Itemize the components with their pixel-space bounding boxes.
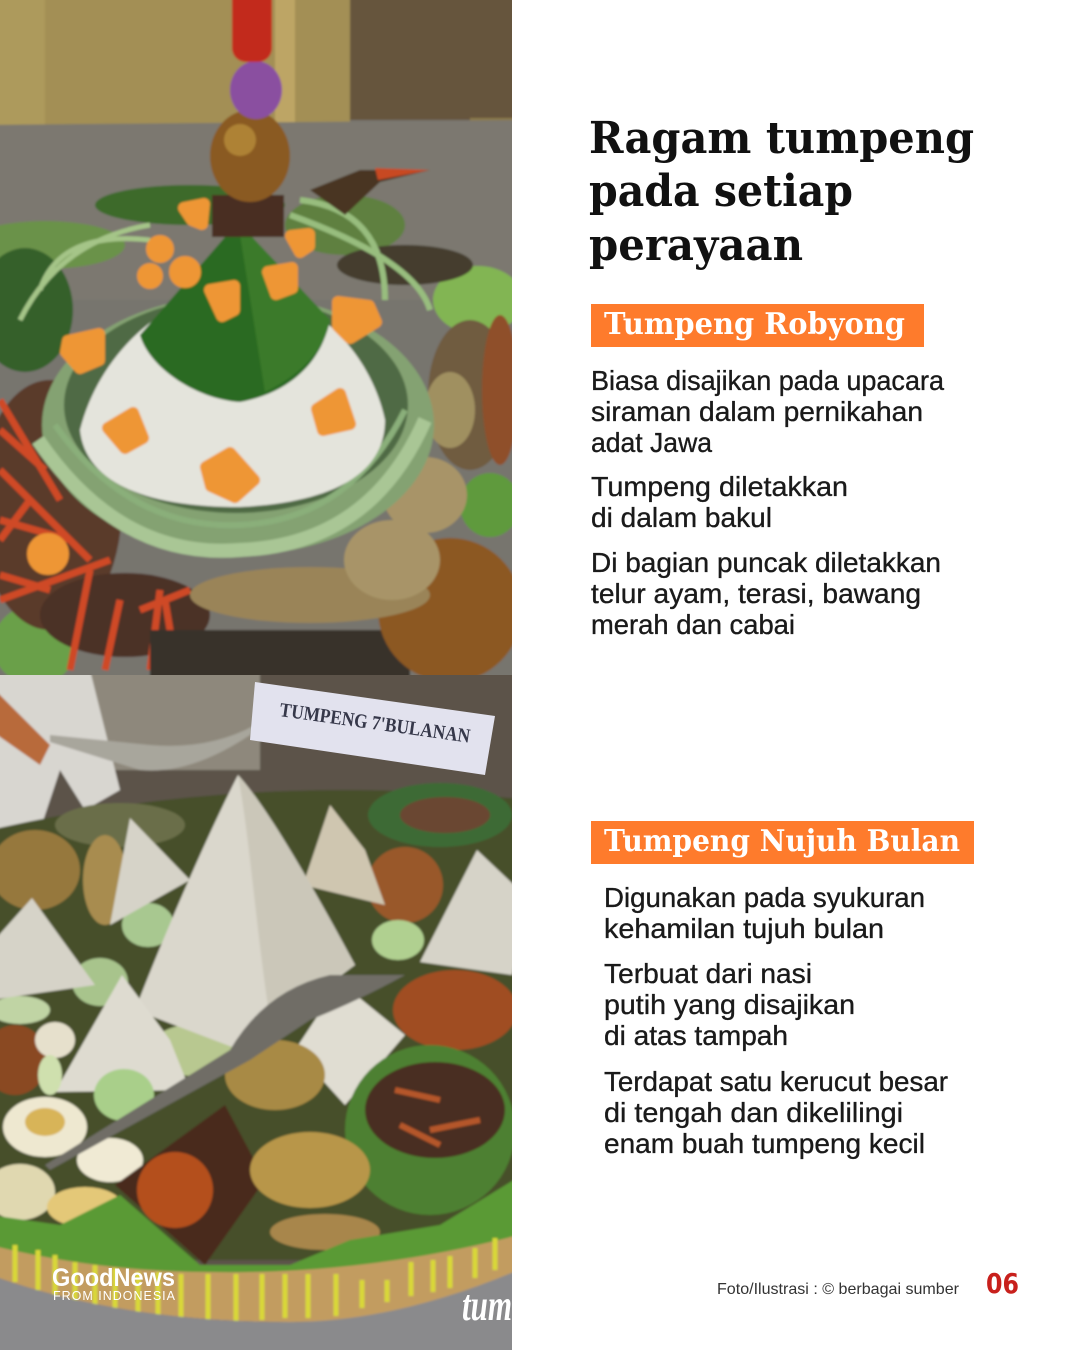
title: perayaan <box>589 220 803 271</box>
banana leaf rim <box>0 1180 512 1274</box>
logo: GoodNews <box>52 1264 176 1303</box>
heading: Tumpeng Robyong: Tumpeng Robyong <box>604 307 905 342</box>
garnish: greens <box>0 185 523 685</box>
flowers <box>33 204 376 569</box>
text block: Tumpeng Robyong: Biasa disajikan pada upacara <box>591 365 944 396</box>
text block: Tumpeng Nujuh Bulan: Terdapat satu kerucut besar <box>604 1066 948 1097</box>
heading: Tumpeng Nujuh Bulan: Tumpeng Nujuh Bulan <box>604 824 960 859</box>
text block: Tumpeng Nujuh Bulan: kehamilan tujuh bulan <box>604 913 884 944</box>
logo: GoodNews: GoodNews <box>52 1264 175 1292</box>
banana leaf cone <box>140 222 330 402</box>
text block: Tumpeng Nujuh Bulan <box>604 882 948 1159</box>
basket <box>20 200 434 555</box>
logo: GoodNews: FROM INDONESIA <box>53 1289 176 1303</box>
title: pada setiap <box>589 166 853 217</box>
text block: Tumpeng Nujuh Bulan: enam buah tumpeng kecil <box>604 1128 925 1159</box>
table edge <box>0 1272 512 1350</box>
title: Ragam tumpeng <box>589 113 974 164</box>
photo credit: Foto/Ilustrasi : © berbagai sumber <box>717 1281 960 1298</box>
text block: Tumpeng Nujuh Bulan: di atas tampah <box>604 1020 788 1051</box>
text block: Tumpeng Robyong: Tumpeng diletakkan <box>591 471 848 502</box>
title <box>589 113 974 271</box>
tray <box>0 1232 530 1322</box>
side dishes <box>45 975 515 1265</box>
cucumber and egg <box>0 1022 154 1227</box>
food bed <box>0 790 530 1260</box>
tumpeng topping <box>210 0 430 237</box>
garnish: chilies <box>0 380 210 670</box>
text block: Tumpeng Nujuh Bulan: di tengah dan dikelilingi <box>604 1097 903 1128</box>
text block: Tumpeng Nujuh Bulan: putih yang disajikan <box>604 989 855 1020</box>
card label <box>250 682 495 775</box>
text block: Tumpeng Robyong: siraman dalam pernikahan <box>591 396 923 427</box>
text block: Tumpeng Robyong: Di bagian puncak diletakkan <box>591 547 941 578</box>
text block: Tumpeng Robyong: di dalam bakul <box>591 502 772 533</box>
page number: 06 <box>986 1267 1019 1300</box>
card label: TUMPENG 7'BULANAN <box>278 699 472 748</box>
text block: Tumpeng Nujuh Bulan: Digunakan pada syukuran <box>604 882 925 913</box>
text block: Tumpeng Robyong: telur ayam, terasi, bawang <box>591 578 921 609</box>
photo: tumpeng nujuh bulan <box>0 660 532 1350</box>
text block: Tumpeng Robyong: adat Jawa <box>591 427 712 458</box>
watermark: tum <box>462 1281 512 1330</box>
photo: tumpeng robyong <box>0 0 532 695</box>
rice cone <box>78 321 387 509</box>
garnish: crackers and fritters <box>150 315 522 682</box>
rice cones <box>0 775 530 1105</box>
text block: Tumpeng Robyong <box>591 365 944 640</box>
text block: Tumpeng Nujuh Bulan: Terbuat dari nasi <box>604 958 812 989</box>
text block: Tumpeng Robyong: merah dan cabai <box>591 609 795 640</box>
